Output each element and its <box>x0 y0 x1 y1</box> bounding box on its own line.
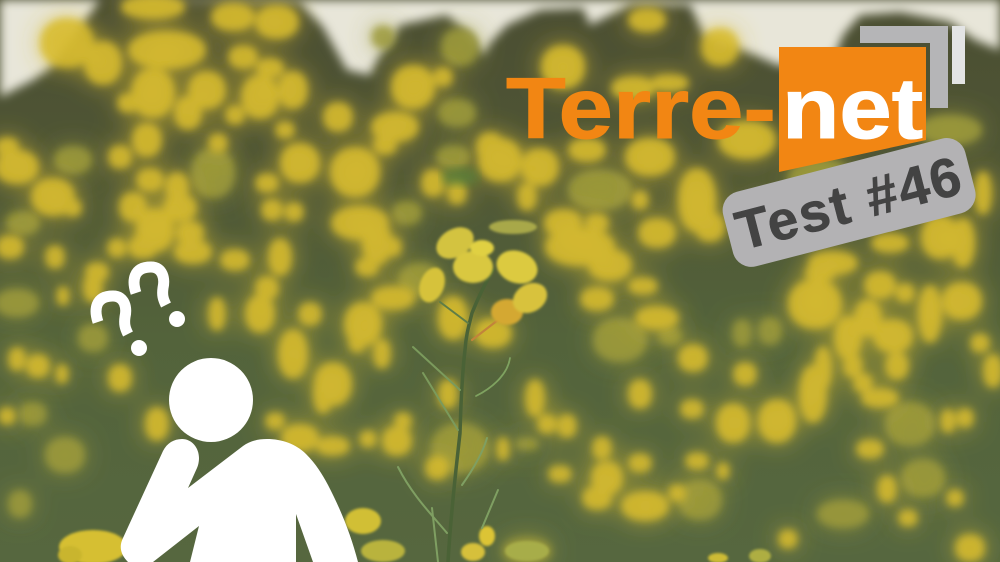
body and arm <box>121 439 358 562</box>
logo orange square <box>779 47 926 172</box>
bottom flower clusters <box>58 508 771 562</box>
logo wordmark: Terre- <box>506 61 776 157</box>
logo grey corner bars <box>860 26 965 108</box>
logo: Terre-net <box>506 26 965 172</box>
badge: Test #46: Test #46 <box>729 144 969 262</box>
central rapeseed plant <box>398 220 553 562</box>
icon: thinking person <box>121 358 358 562</box>
head <box>169 358 253 442</box>
logo: Terre-net: net <box>782 61 923 157</box>
icon: question marks <box>96 267 185 356</box>
